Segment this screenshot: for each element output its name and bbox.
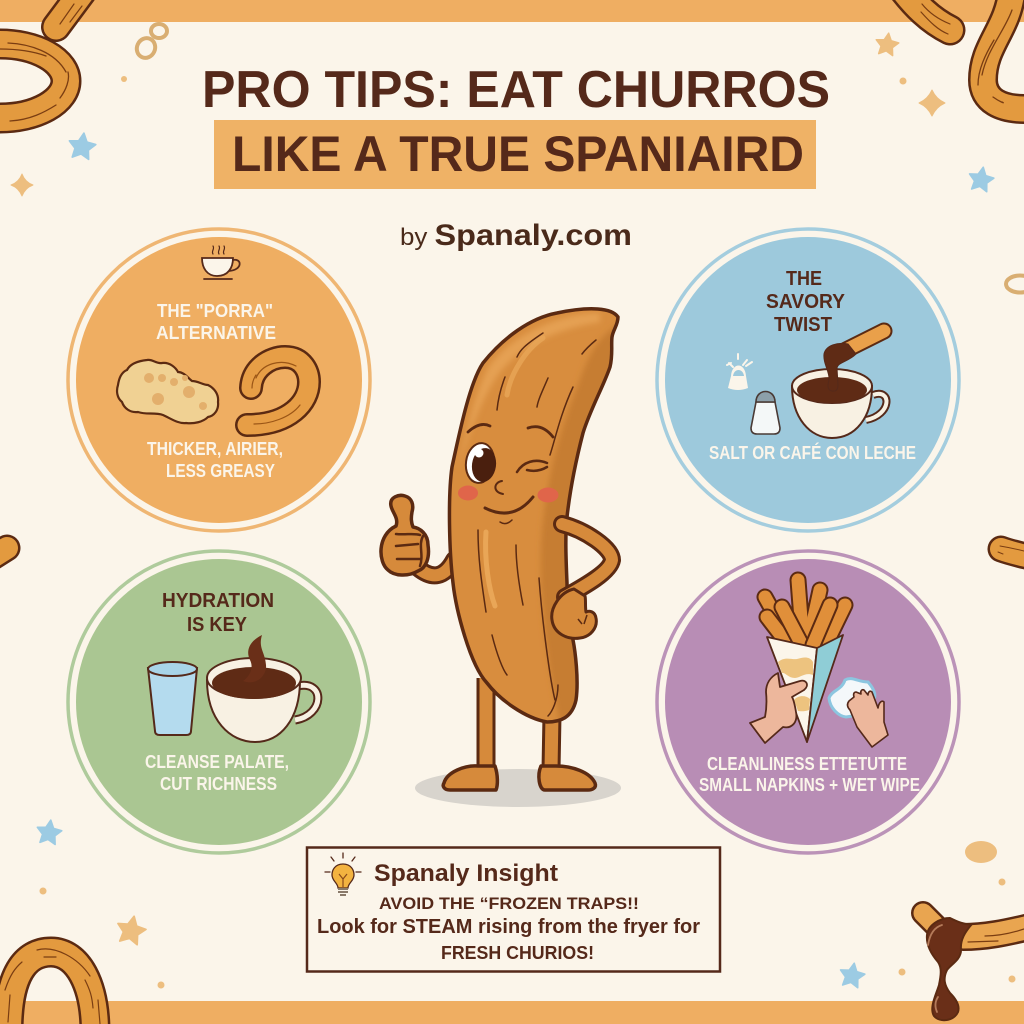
- panel: the savory twist: [657, 229, 959, 531]
- title line 2: LIKE A TRUE SPANIAIRD: [232, 126, 804, 182]
- smile: [485, 497, 533, 513]
- panel: cleanliness etiquette: [657, 551, 959, 853]
- ground shadow: [415, 769, 621, 807]
- panel: the savory twist: TWIST: [774, 314, 832, 336]
- panel: the porra alternative: LESS GREASY: [166, 461, 275, 481]
- legs: [486, 678, 552, 770]
- decoration: small outline rings: [134, 24, 1024, 292]
- caption: CLEANLINESS ETTETUTTE: [707, 754, 907, 774]
- nose: [495, 481, 503, 494]
- icon: lightbulb: [325, 853, 361, 895]
- churro: left edge stub: [0, 548, 7, 560]
- panel: hydration is key: CUT RICHNESS: [160, 774, 277, 794]
- bottom band: [0, 1001, 1024, 1024]
- churro: top-left ring: [0, 43, 69, 121]
- illustration: cup of chocolate: [207, 635, 318, 742]
- star: orange top right: [874, 32, 900, 56]
- hand on hip: [552, 589, 596, 638]
- icon: coffee cup: [202, 246, 240, 279]
- body crease lines: [478, 333, 596, 716]
- byline: by Spanaly.com: [400, 219, 632, 252]
- illustration: dipped churro: [824, 331, 884, 391]
- caption: THICKER, AIRIER,: [147, 439, 283, 459]
- ring: upper: [151, 24, 167, 38]
- panel: the savory twist: SAVORY: [766, 291, 846, 313]
- star: blue lower right: [838, 961, 866, 989]
- face: [458, 424, 558, 524]
- sparkle: right: [919, 90, 945, 116]
- churro: top-right stick: [900, 0, 950, 34]
- callout: spanaly insight: FRESH CHURIOS!: [441, 943, 594, 963]
- caption: CLEANSE PALATE,: [145, 752, 289, 772]
- right arm: [562, 524, 612, 597]
- illustration: cup of chocolate: [792, 369, 886, 438]
- star: blue right: [967, 165, 995, 193]
- left foot: [443, 766, 497, 790]
- caption: SALT OR CAFÉ CON LECHE: [709, 442, 916, 463]
- winking eye: [517, 461, 547, 472]
- star: blue lower left: [35, 818, 63, 845]
- icon: salt shaker: [751, 392, 780, 434]
- body outline: [449, 309, 618, 722]
- illustration: left hand: [750, 673, 807, 743]
- illustration: porra dough: [117, 360, 218, 423]
- heading: THE: [786, 268, 822, 290]
- left arm: [418, 560, 454, 575]
- churro: bottom-right dipped: [923, 913, 1024, 1020]
- illustration: right hand: [847, 690, 888, 747]
- body shading: [465, 312, 613, 718]
- top band: [0, 0, 1024, 22]
- icon: white bag with rays: [727, 354, 752, 390]
- panel: the porra alternative: [68, 229, 370, 531]
- churro: bottom-left arch: [5, 949, 100, 1024]
- callout body: AVOID THE “FROZEN TRAPS!!: [379, 894, 639, 913]
- illustration: churro bundle: [765, 580, 845, 645]
- thumbs-up hand: [381, 495, 429, 575]
- churro: right edge stub: [998, 546, 1024, 558]
- cheeks: [458, 486, 478, 500]
- illustration: paper cone: [767, 635, 843, 742]
- open eye: [463, 441, 497, 485]
- heading: HYDRATION: [162, 590, 274, 612]
- callout heading: Spanaly Insight: [374, 860, 558, 887]
- illustration: curled churro: [247, 357, 309, 425]
- churro: top-right curl: [978, 0, 1024, 109]
- star: blue upper left: [67, 131, 97, 160]
- callout: spanaly insight: Look for STEAM rising from the fryer for: [317, 916, 700, 938]
- heading: THE "PORRA": [157, 301, 273, 321]
- ring: lower: [134, 35, 158, 61]
- churro: top-left stick: [56, 0, 82, 27]
- mascot: winking churro: [381, 309, 630, 807]
- panel: hydration is key: IS KEY: [187, 614, 248, 636]
- swirl: [243, 635, 266, 682]
- eyebrows: [468, 424, 553, 437]
- illustration: napkin: [829, 679, 875, 717]
- callout: spanaly insight: [307, 848, 720, 972]
- right foot: [539, 766, 595, 790]
- panel: cleanliness etiquette: SMALL NAPKINS + WET WIPE: [699, 775, 920, 795]
- title highlight band: [214, 120, 816, 189]
- sparkle: left: [11, 174, 33, 196]
- panel: the porra alternative: ALTERNATIVE: [156, 323, 276, 343]
- illustration: water glass: [148, 662, 197, 735]
- panel: hydration is key: [68, 551, 370, 853]
- title line 1: PRO TIPS: EAT CHURROS: [202, 61, 830, 119]
- body: [449, 309, 618, 722]
- star: orange bottom left: [115, 913, 148, 946]
- ring: right edge: [1006, 276, 1024, 292]
